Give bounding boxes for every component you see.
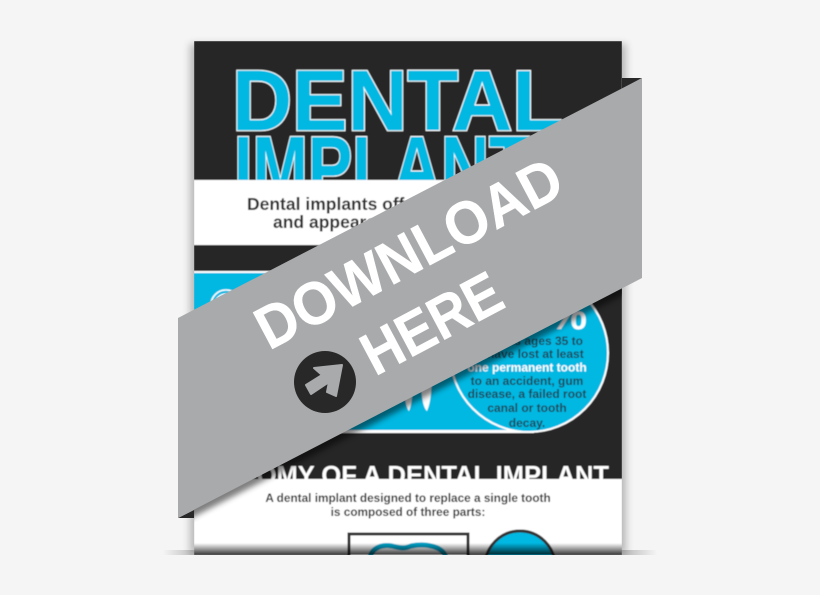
page bottom shading — [194, 543, 622, 555]
anatomy panel: A dental implant designed to replace a single tooth — [265, 491, 551, 505]
stat circle: disease, a failed root — [468, 387, 586, 401]
infographic page — [188, 41, 622, 595]
icon: blue circle — [484, 528, 556, 555]
floor shadow — [163, 550, 657, 555]
banner fold right — [622, 78, 642, 89]
icon: arrow button — [294, 351, 356, 413]
stat circle: to an accident, gum — [471, 374, 583, 388]
title: DENTAL — [232, 54, 563, 149]
banner text: download: DOWNLOAD — [244, 144, 574, 362]
stat circle: decay. — [509, 416, 545, 430]
anatomy panel: is composed of three parts: — [331, 505, 485, 519]
stat circle: 69% — [503, 291, 587, 338]
banner fold left — [178, 510, 194, 518]
banner text: here: HERE — [350, 259, 514, 388]
stat circle: 44 have lost at least — [470, 347, 584, 361]
intro panel: Dental implants offer the function, feel — [247, 194, 566, 214]
blue statistics panel — [194, 271, 608, 433]
anatomy panel — [194, 478, 622, 555]
title — [235, 68, 562, 180]
anatomy heading: ANATOMY OF A DENTAL IMPLANT — [188, 462, 609, 490]
title: IMPLANTS — [234, 120, 574, 215]
intro panel: and appearance of natural teeth. — [273, 212, 542, 232]
stat circle: canal or tooth — [487, 401, 567, 415]
download banner — [178, 78, 642, 518]
icon: tooth roots — [404, 386, 432, 412]
stat circle — [452, 304, 610, 434]
banner shadow — [194, 288, 622, 521]
stat circle: of adults ages 35 to — [471, 334, 583, 348]
title: DENTAL — [232, 54, 563, 149]
stat circle: one permanent tooth — [467, 360, 587, 374]
icon: crown in square — [346, 532, 470, 555]
title: IMPLANTS — [234, 120, 574, 215]
intro panel — [194, 179, 446, 246]
page drop shadow — [190, 44, 626, 555]
icon: fingerprint rings — [210, 288, 233, 302]
